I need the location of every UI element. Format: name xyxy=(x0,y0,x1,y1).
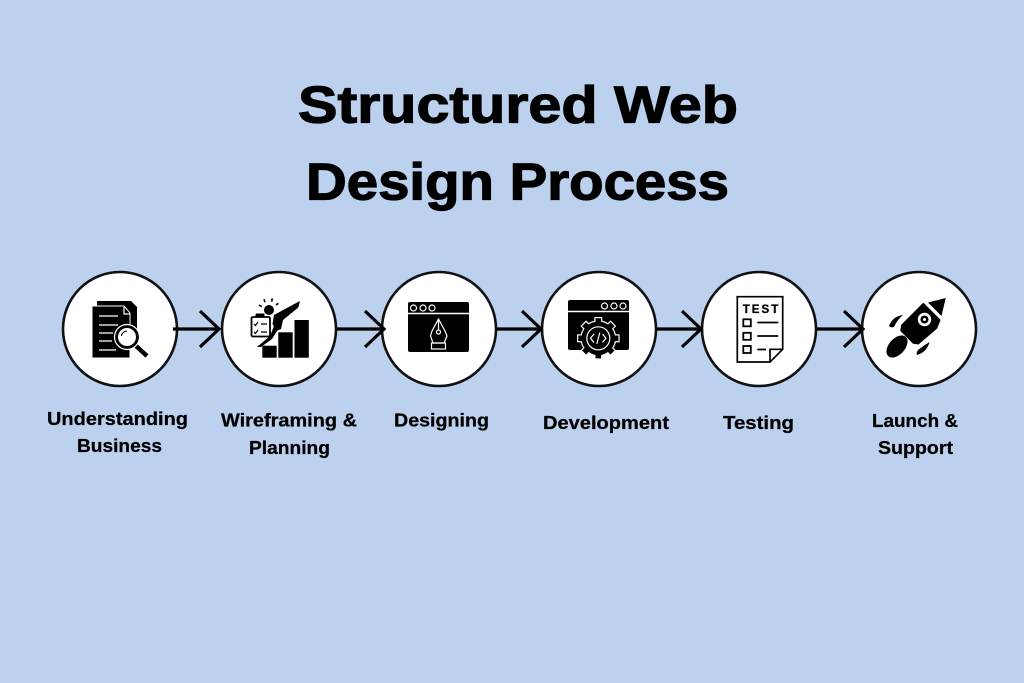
step 6 circle xyxy=(862,272,976,386)
step 2 circle xyxy=(222,272,336,386)
label: Wireframing & Planning: Planning xyxy=(249,437,330,458)
icon: planner with chart xyxy=(252,298,309,358)
label: Testing: Testing xyxy=(723,412,794,433)
label: Understanding Business: Business xyxy=(77,435,162,456)
arrow: step 4 to 5 xyxy=(656,311,701,347)
title: Design Process xyxy=(306,154,729,212)
icon: test checklist xyxy=(737,297,783,362)
arrow: step 1 to 2 xyxy=(173,311,219,347)
arrow: step 2 to 3 xyxy=(337,311,384,347)
title: Structured Web xyxy=(298,77,738,135)
step 3 circle xyxy=(382,272,496,386)
step 4 circle xyxy=(542,272,656,386)
icon: browser window with code gear xyxy=(568,300,629,360)
step 5 circle xyxy=(702,272,816,386)
step 1 circle xyxy=(63,272,177,386)
title xyxy=(298,77,738,212)
label: Launch & Support: Launch & xyxy=(872,410,958,431)
label: Development: Development xyxy=(543,412,669,433)
icon: rocket xyxy=(882,298,946,362)
label: Launch & Support: Support xyxy=(878,437,953,458)
icon: document with magnifier xyxy=(92,301,147,358)
label: Understanding Business xyxy=(47,408,188,456)
label: Designing: Designing xyxy=(394,410,489,431)
arrow: step 3 to 4 xyxy=(496,311,541,347)
icon: test checklist: TEST xyxy=(743,304,778,316)
icon: browser window with pen nib xyxy=(408,302,469,352)
label: Understanding Business: Understanding xyxy=(47,408,188,429)
label: Wireframing & Planning: Wireframing & xyxy=(221,410,357,431)
arrow: step 5 to 6 xyxy=(817,311,863,347)
label: Wireframing & Planning xyxy=(221,410,357,458)
label: Launch & Support xyxy=(872,410,958,458)
